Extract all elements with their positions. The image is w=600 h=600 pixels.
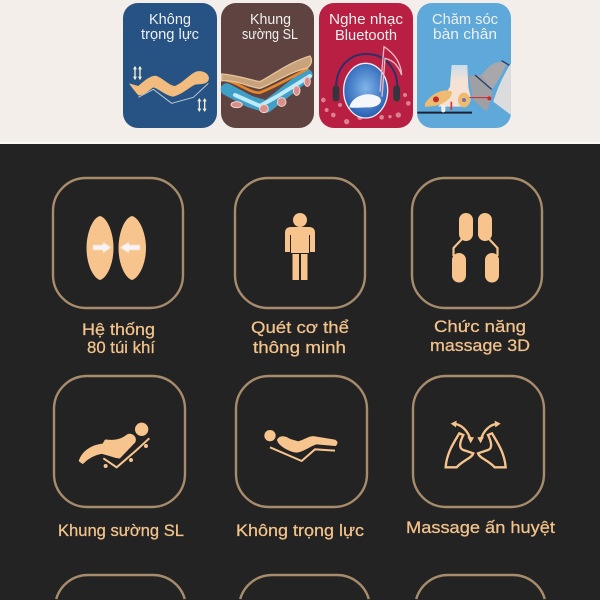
card: Nghe nhạc Bluetooth: Bluetooth	[335, 28, 397, 44]
label	[251, 318, 349, 357]
card: Không trọng lực	[123, 3, 217, 128]
icon: person	[285, 213, 315, 280]
label: Chức năng	[434, 317, 526, 336]
label: Khung sường SL	[58, 521, 184, 540]
label: Massage ấn huyệt	[406, 518, 555, 537]
card: Nghe nhạc Bluetooth: Nghe nhạc	[329, 12, 403, 28]
label	[82, 320, 155, 357]
icon: 3D rollers	[452, 213, 499, 282]
tile: Hệ thống 80 túi khí	[53, 178, 183, 357]
card: Khung sường SL: sường SL	[242, 27, 298, 43]
card: Không trọng lực: trọng lực	[141, 27, 199, 43]
label: thông minh	[253, 338, 346, 357]
tile: bottom row middle	[240, 575, 369, 599]
label: Quét cơ thể	[251, 318, 349, 337]
label: Hệ thống	[82, 320, 155, 339]
card: Không trọng lực: Không	[149, 12, 191, 28]
top light band	[0, 0, 600, 142]
card: Chăm sóc bàn chân	[417, 3, 511, 128]
tile: Chức năng massage 3D	[412, 178, 542, 355]
icon: SL frame	[80, 423, 149, 468]
card: Chăm sóc bàn chân: bàn chân	[433, 27, 497, 43]
dark panel	[0, 144, 600, 600]
label: Không trọng lực	[236, 521, 365, 540]
icon: acupressure	[446, 421, 506, 467]
label: 80 túi khí	[87, 338, 155, 357]
card: Nghe nhạc Bluetooth	[319, 3, 413, 128]
icon: zero gravity	[264, 430, 337, 461]
label: massage 3D	[430, 336, 530, 355]
tile: Quét cơ thể thông minh	[235, 178, 365, 357]
card: Chăm sóc bàn chân: Chăm sóc	[432, 12, 498, 28]
icon: airbags	[86, 216, 146, 280]
label	[430, 317, 530, 355]
tile: Massage ấn huyệt	[406, 376, 555, 537]
tile: bottom row left	[56, 575, 185, 599]
tile: Không trọng lực	[236, 376, 367, 540]
card: Khung sường SL: Khung	[250, 12, 291, 28]
tile: bottom row right	[416, 575, 545, 599]
card: Khung sường SL	[221, 3, 314, 128]
tile: Khung sường SL	[54, 376, 185, 540]
